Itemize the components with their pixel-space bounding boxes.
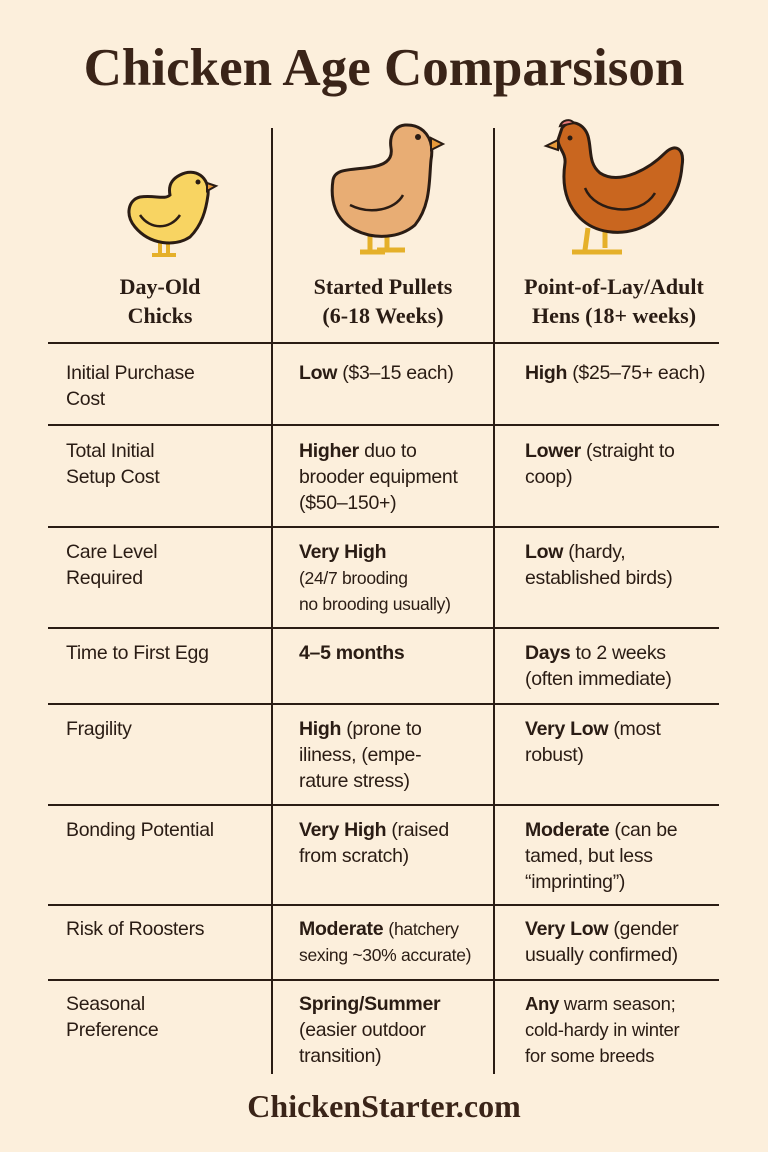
text: ($50–150+) bbox=[299, 492, 396, 514]
text: brooder equipment bbox=[299, 466, 458, 488]
header: started pullets bbox=[314, 274, 452, 328]
text: Risk of Roosters bbox=[66, 918, 204, 940]
text: Very High bbox=[299, 541, 386, 563]
text: (24/7 brooding bbox=[299, 568, 408, 588]
text: Very Low (most bbox=[525, 718, 661, 740]
text: Setup Cost bbox=[66, 466, 159, 488]
text: (often immediate) bbox=[525, 668, 672, 690]
text: “imprinting”) bbox=[525, 871, 625, 893]
header: day-old chicks: Chicks bbox=[128, 303, 192, 328]
row labels bbox=[66, 362, 195, 410]
header: adult hens bbox=[524, 274, 704, 328]
text: Preference bbox=[66, 1019, 158, 1041]
text: Total Initial bbox=[66, 440, 154, 462]
text: Moderate (can be bbox=[525, 819, 677, 841]
text: Bonding Potential bbox=[66, 819, 214, 841]
footer: ChickenStarter.com bbox=[247, 1088, 521, 1124]
text: sexing ~30% accurate) bbox=[299, 945, 471, 965]
header: adult hens: Point-of-Lay/Adult bbox=[524, 274, 704, 299]
text: usually confirmed) bbox=[525, 944, 678, 966]
text: tamed, but less bbox=[525, 845, 653, 867]
text: (easier outdoor bbox=[299, 1019, 426, 1041]
header: day-old chicks bbox=[120, 274, 200, 328]
column 2 cells: Low ($3–15 each) bbox=[299, 362, 454, 384]
text: Very Low (gender bbox=[525, 918, 678, 940]
text: for some breeds bbox=[525, 1045, 654, 1066]
title: Chicken Age Comparsison bbox=[84, 39, 684, 97]
text: Care Level bbox=[66, 541, 157, 563]
text: Seasonal bbox=[66, 993, 145, 1015]
text: High (prone to bbox=[299, 718, 422, 740]
row labels: Cost bbox=[66, 388, 105, 410]
text: Spring/Summer bbox=[299, 993, 440, 1015]
icon: pullet bbox=[330, 124, 446, 254]
text: 4–5 months bbox=[299, 642, 404, 664]
header: started pullets: (6-18 Weeks) bbox=[322, 303, 444, 328]
text: Moderate (hatchery bbox=[299, 918, 459, 940]
header: started pullets: Started Pullets bbox=[314, 274, 452, 299]
icon: chick bbox=[127, 170, 218, 257]
text: iliness, (empe- bbox=[299, 744, 421, 766]
text: Time to First Egg bbox=[66, 642, 209, 664]
text: Very High (raised bbox=[299, 819, 449, 841]
text: Any warm season; bbox=[525, 993, 675, 1014]
text: Lower (straight to bbox=[525, 440, 675, 462]
row labels: Initial Purchase bbox=[66, 362, 195, 384]
text: transition) bbox=[299, 1045, 381, 1067]
header: adult hens: Hens (18+ weeks) bbox=[532, 303, 696, 328]
text: Days to 2 weeks bbox=[525, 642, 666, 664]
text: Required bbox=[66, 567, 143, 589]
text: from scratch) bbox=[299, 845, 409, 867]
text: no brooding usually) bbox=[299, 594, 451, 614]
column 3 cells: High ($25–75+ each) bbox=[525, 362, 705, 384]
text: robust) bbox=[525, 744, 584, 766]
text: established birds) bbox=[525, 567, 672, 589]
text: Fragility bbox=[66, 718, 132, 740]
text: Low (hardy, bbox=[525, 541, 625, 563]
text: Higher duo to bbox=[299, 440, 417, 462]
header: day-old chicks: Day-Old bbox=[120, 274, 200, 299]
icon: hen bbox=[544, 119, 684, 254]
text: cold-hardy in winter bbox=[525, 1019, 679, 1040]
text: rature stress) bbox=[299, 770, 410, 792]
text: coop) bbox=[525, 466, 572, 488]
